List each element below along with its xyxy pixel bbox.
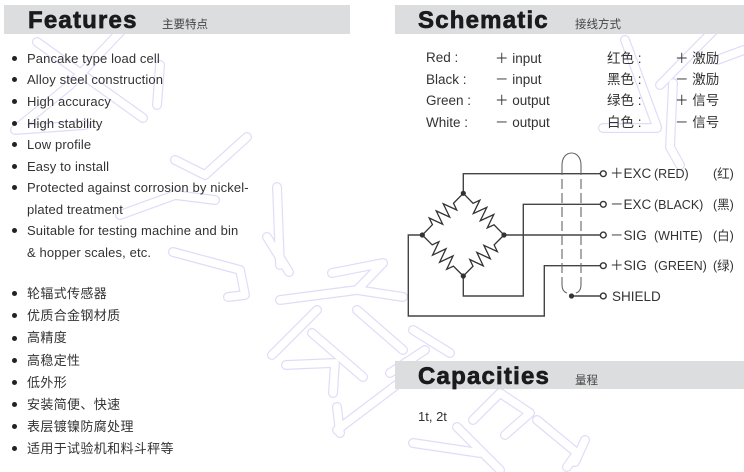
terminal labels: (RED) [654, 167, 689, 181]
capacities header band [395, 361, 744, 389]
terminal labels: (绿) [713, 259, 734, 273]
English wire colour table: － output [495, 115, 550, 130]
wires [408, 174, 600, 316]
bridge nodes [420, 191, 574, 299]
Chinese feature list: 表层镀镍防腐处理 [27, 419, 134, 434]
schematic header band [395, 5, 744, 34]
panel: features [4, 5, 350, 456]
heading: capacities: Capacities [418, 363, 550, 390]
Chinese wire colour table: － 信号 [675, 115, 719, 130]
English wire colour table: Black : [426, 72, 467, 87]
English feature list: Easy to install [27, 159, 109, 174]
English feature list: High accuracy [27, 94, 111, 109]
English wire colour table: Green : [426, 93, 471, 108]
Chinese feature list: 优质合金钢材质 [27, 308, 120, 323]
panel: capacities [395, 361, 744, 424]
Chinese wire colour table: 红色 : [607, 51, 642, 66]
terminal labels: SHIELD [612, 289, 661, 304]
English feature list: Protected against corrosion by nickel- [27, 180, 249, 195]
terminal labels: －EXC [610, 197, 651, 212]
Chinese wire colour table: － 激励 [675, 72, 719, 87]
bridge resistors [417, 188, 509, 281]
terminals [600, 171, 606, 299]
Chinese feature list: 轮辐式传感器 [27, 286, 107, 301]
English feature list: High stability [27, 116, 103, 131]
subheading: capacities Chinese: 量程 [575, 375, 598, 387]
English feature list: plated treatment [27, 202, 123, 217]
Chinese wire colour table: 白色 : [607, 115, 642, 130]
Chinese wire colour table [607, 51, 719, 130]
panel: schematic [395, 5, 744, 130]
Chinese feature list: 安装简便、快速 [27, 397, 120, 412]
Chinese wire colour table: ＋ 信号 [675, 93, 719, 108]
English wire colour table [426, 50, 550, 130]
terminal labels: (GREEN) [654, 259, 707, 273]
terminal labels: (BLACK) [654, 198, 703, 212]
capacity values: 1t, 2t [418, 409, 447, 424]
Chinese feature list [12, 286, 174, 456]
English feature list: Pancake type load cell [27, 51, 160, 66]
English feature list [12, 51, 249, 260]
English wire colour table: ＋ output [495, 93, 550, 108]
heading: features: Features [28, 7, 138, 34]
heading: schematic: Schematic [418, 7, 549, 34]
Chinese wire colour table: 黑色 : [607, 72, 642, 87]
English feature list: & hopper scales, etc. [27, 245, 151, 260]
Chinese feature list: 高稳定性 [27, 353, 80, 368]
terminal labels: (红) [713, 167, 734, 181]
features header band [4, 5, 350, 34]
English feature list: Low profile [27, 137, 91, 152]
English feature list: Suitable for testing machine and bin [27, 223, 238, 238]
subheading: schematic Chinese: 接线方式 [575, 19, 621, 31]
subheading: features Chinese: 主要特点 [162, 19, 208, 31]
Chinese feature list: 高精度 [27, 330, 67, 345]
cable shield [562, 153, 581, 293]
English feature list: Alloy steel construction [27, 72, 163, 87]
Chinese wire colour table: 绿色 : [607, 93, 642, 108]
terminal labels: (白) [713, 229, 734, 243]
Chinese feature list: 适用于试验机和料斗秤等 [27, 441, 174, 456]
terminal labels: (WHITE) [654, 229, 703, 243]
terminal labels [610, 166, 734, 304]
terminal labels: ＋EXC [610, 166, 651, 181]
English wire colour table: Red : [426, 50, 458, 65]
English wire colour table: － input [495, 72, 542, 87]
terminal labels: (黑) [713, 198, 734, 212]
English wire colour table: White : [426, 115, 468, 130]
terminal labels: ＋SIG [610, 258, 647, 273]
Chinese wire colour table: ＋ 激励 [675, 51, 719, 66]
Chinese feature list: 低外形 [27, 375, 67, 390]
English wire colour table: ＋ input [495, 51, 542, 66]
terminal labels: －SIG [610, 228, 647, 243]
